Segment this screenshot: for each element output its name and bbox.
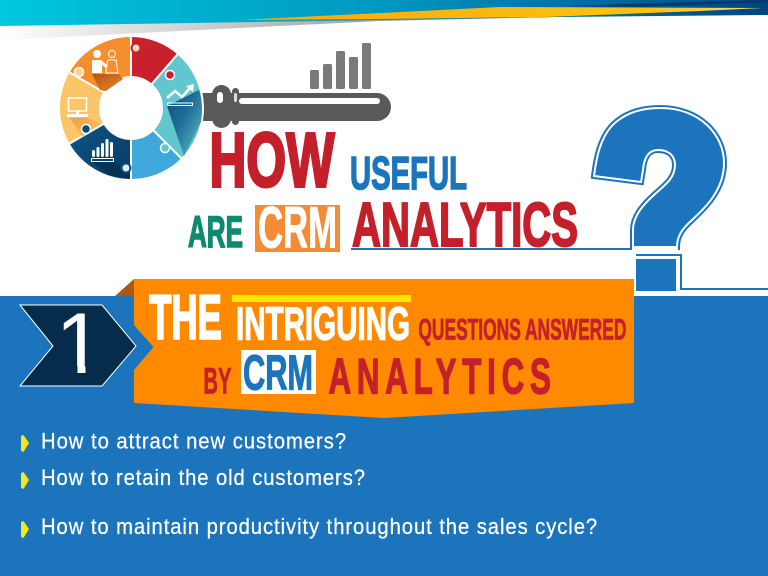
CRM orange badge: CRM xyxy=(258,196,337,260)
word: INTRIGUING: INTRIGUING xyxy=(236,297,410,349)
segment: navy xyxy=(69,124,131,180)
words: questions answered: QUESTIONS ANSWERED xyxy=(418,314,626,347)
icon: handshake xyxy=(92,50,118,73)
wheel of puzzle segments xyxy=(59,36,203,180)
word: HOW: HOW xyxy=(210,118,335,204)
icon: key with bar chart xyxy=(190,43,391,128)
bullet two: How to retain the old customers? xyxy=(41,465,365,490)
wheel shading and puzzle knobs xyxy=(70,44,202,178)
segment: red xyxy=(131,36,178,85)
key shaft xyxy=(190,85,391,128)
key bar chart xyxy=(310,43,371,89)
segment: orange xyxy=(69,36,131,92)
heading: how useful are CRM analytics xyxy=(188,118,578,260)
orange banner xyxy=(115,279,634,418)
CRM orange badge xyxy=(255,196,340,260)
icon: bar chart on navy xyxy=(92,139,114,162)
word: spaced ANALYTICS: ANALYTICS xyxy=(328,348,557,404)
word: BY: BY xyxy=(203,361,232,402)
icon: rising line chart xyxy=(167,84,194,106)
yellow accent bar xyxy=(232,295,411,302)
word: ARE: ARE xyxy=(188,208,243,257)
number chevron: 1 xyxy=(56,296,103,392)
bullet one: How to attract new customers? xyxy=(41,429,346,454)
header banner xyxy=(0,0,768,40)
icon: question mark xyxy=(594,108,768,291)
CRM white badge: CRM xyxy=(243,345,313,400)
bullet three: How to maintain productivity throughout the sales cycle? xyxy=(41,514,597,539)
icon: monitor xyxy=(67,98,88,117)
word: USEFUL: USEFUL xyxy=(350,147,467,199)
segment: yellow xyxy=(59,72,104,144)
blue lower panel xyxy=(0,296,768,576)
word: ANALYTICS: ANALYTICS xyxy=(352,190,578,260)
CRM white badge xyxy=(241,345,316,400)
bullet list xyxy=(21,429,597,539)
segment: light blue xyxy=(131,130,182,180)
segment: teal xyxy=(151,54,203,159)
number chevron xyxy=(19,304,137,386)
underline to question mark xyxy=(351,248,632,250)
banner heading xyxy=(149,284,626,404)
word: THE: THE xyxy=(149,284,222,353)
